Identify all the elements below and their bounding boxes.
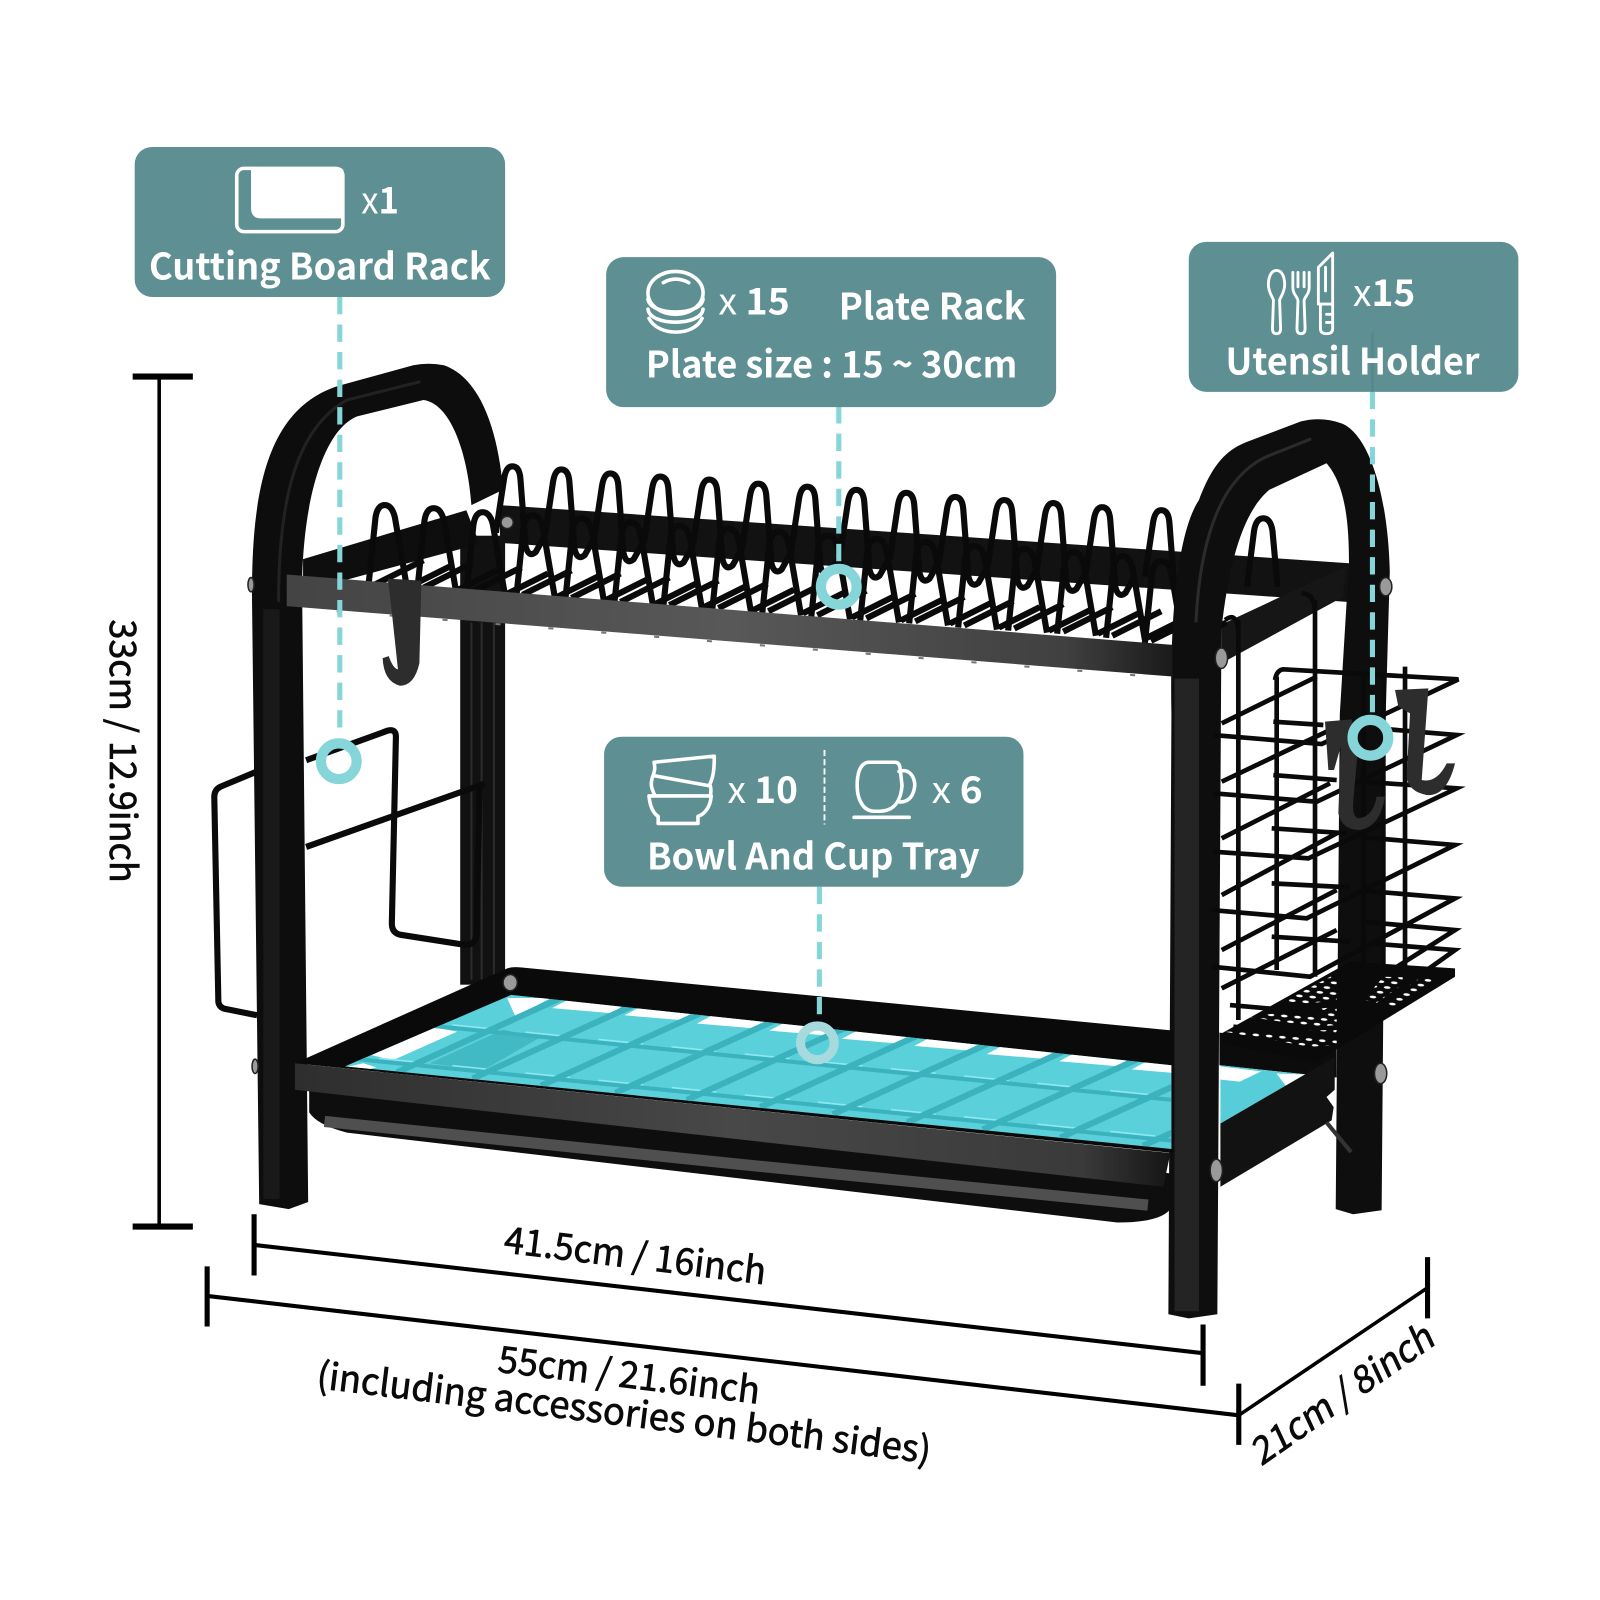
latch	[1327, 1122, 1351, 1152]
heading: Bowl And Cup Tray	[647, 826, 980, 880]
mat white gaps right of post	[1220, 1066, 1305, 1086]
icon: bowl stack	[649, 756, 714, 823]
mat cross rib highlights	[379, 1024, 1155, 1137]
right arch and posts	[1168, 419, 1390, 1318]
leader inside panel	[1371, 333, 1374, 392]
icon: spoon fork knife	[1268, 253, 1333, 334]
mat diagonal ribs	[396, 999, 1172, 1147]
dimension: depth: 21cm / 8inch	[1243, 1304, 1441, 1477]
upper shelf back rail	[500, 505, 1349, 602]
bowl quantity: x 10	[728, 760, 798, 814]
lone tine inside right arch	[1247, 518, 1278, 587]
leader line: plate rack	[836, 406, 841, 567]
left hook	[383, 579, 421, 686]
ring marker: utensil holder	[1353, 720, 1388, 756]
dimension: frame width	[254, 1210, 1203, 1386]
quantity: x1	[361, 170, 399, 224]
mat cross ribs	[356, 1024, 1172, 1142]
front row of plate tines	[368, 505, 1227, 645]
ring marker: plate rack	[821, 569, 857, 605]
screws	[248, 516, 1392, 1182]
upper shelf front rail	[287, 574, 1172, 677]
leader line: utensil holder	[1370, 392, 1375, 716]
heading: Cutting Board Rack	[149, 237, 491, 291]
dimension: full width: 55cm / 21.6inch	[496, 1329, 763, 1415]
dimension: frame width: 41.5cm / 16inch	[502, 1210, 770, 1295]
left side rail of upper shelf	[303, 510, 480, 587]
darker mat cell	[430, 1030, 540, 1070]
basket hook one	[1325, 719, 1385, 830]
back row of plate tines	[496, 466, 1194, 598]
mat back edge white gaps	[345, 998, 1203, 1074]
utensil quantity: x15	[1353, 263, 1415, 317]
back left post	[460, 536, 505, 985]
ring marker: bowl tray	[801, 1026, 834, 1060]
heading: Utensil Holder	[1226, 331, 1481, 385]
lower tray back and sides	[295, 967, 1173, 1153]
basket hook two	[1395, 688, 1455, 795]
leader line: bowl tray	[817, 887, 822, 1023]
dimension: height	[99, 377, 193, 1227]
left arch and front post	[252, 364, 503, 1209]
teal drying mat	[345, 994, 1172, 1149]
right lower side rail	[1220, 1057, 1335, 1187]
cutting board holder wire	[214, 730, 485, 1015]
ring marker: cutting board	[321, 743, 357, 779]
cup quantity: x 6	[932, 760, 983, 814]
icon: cutting board	[237, 167, 344, 232]
dimension: full width: (including accessories on both sides)	[314, 1345, 935, 1474]
panel: bowl and cup tray	[604, 737, 1023, 887]
tray front face	[295, 1063, 1170, 1187]
perforations	[1225, 973, 1437, 1047]
mat piece right of post	[1220, 1065, 1305, 1123]
panel: utensil holder	[1189, 242, 1518, 392]
icon: cup	[854, 762, 915, 817]
utensil basket	[1212, 593, 1458, 1062]
icon: plate stack	[648, 271, 703, 332]
leader line: cutting board	[337, 297, 342, 737]
tray back band right of post	[1219, 1033, 1337, 1078]
dimension: height: 33cm / 12.9inch	[99, 619, 153, 883]
panel: cutting board rack	[135, 147, 505, 297]
plate size: Plate size : 15 ~ 30cm	[646, 335, 1017, 389]
heading: Plate Rack	[839, 276, 1026, 330]
plate quantity: x 15	[718, 271, 790, 325]
dimension: full width	[207, 1266, 1239, 1474]
basket wires	[1212, 593, 1458, 1037]
panel: plate rack	[606, 257, 1056, 407]
divider	[823, 750, 825, 824]
basket floor	[1222, 962, 1455, 1062]
right side rail of upper shelf	[1221, 566, 1346, 663]
drip tray	[309, 1082, 1171, 1222]
dish rack product	[214, 364, 1458, 1318]
rail bolt tips	[337, 611, 1163, 678]
